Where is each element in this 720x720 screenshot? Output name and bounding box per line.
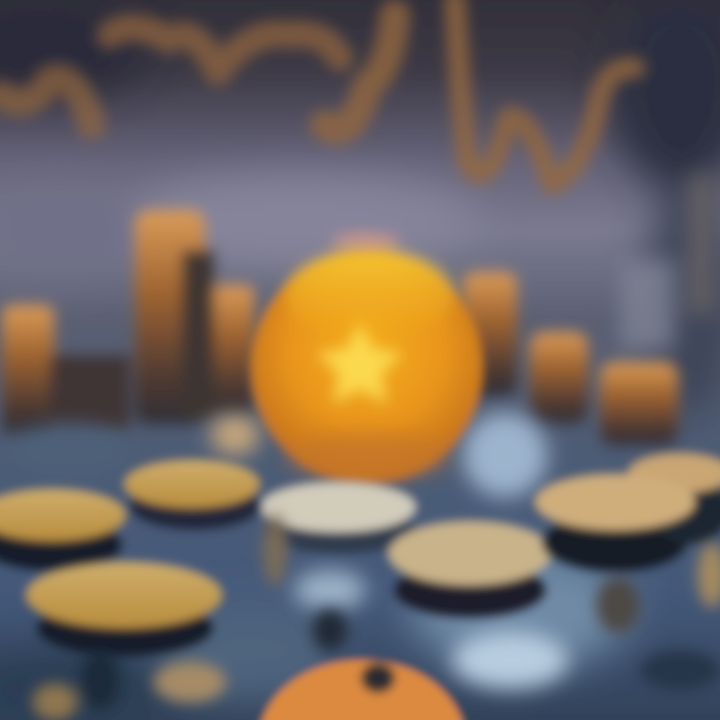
coin: right bbox=[535, 453, 720, 572]
coin: far left bbox=[0, 489, 126, 571]
far right pale tower bbox=[620, 175, 714, 350]
icon: star on sphere bbox=[317, 322, 403, 404]
coin: upper left bbox=[124, 460, 260, 530]
pale blue glints below sphere bbox=[10, 413, 568, 688]
right bar towers bbox=[463, 272, 678, 446]
small coins along the bottom bbox=[33, 514, 720, 720]
upper chart line: orange squiggles bbox=[0, 0, 635, 185]
central golden sphere bbox=[251, 232, 483, 484]
coin: under the sphere bbox=[260, 482, 416, 554]
coin: center right bbox=[388, 521, 552, 618]
orange coin at bottom edge bbox=[258, 660, 466, 720]
left bar towers bbox=[2, 210, 254, 435]
coin: lower left bbox=[26, 562, 222, 656]
